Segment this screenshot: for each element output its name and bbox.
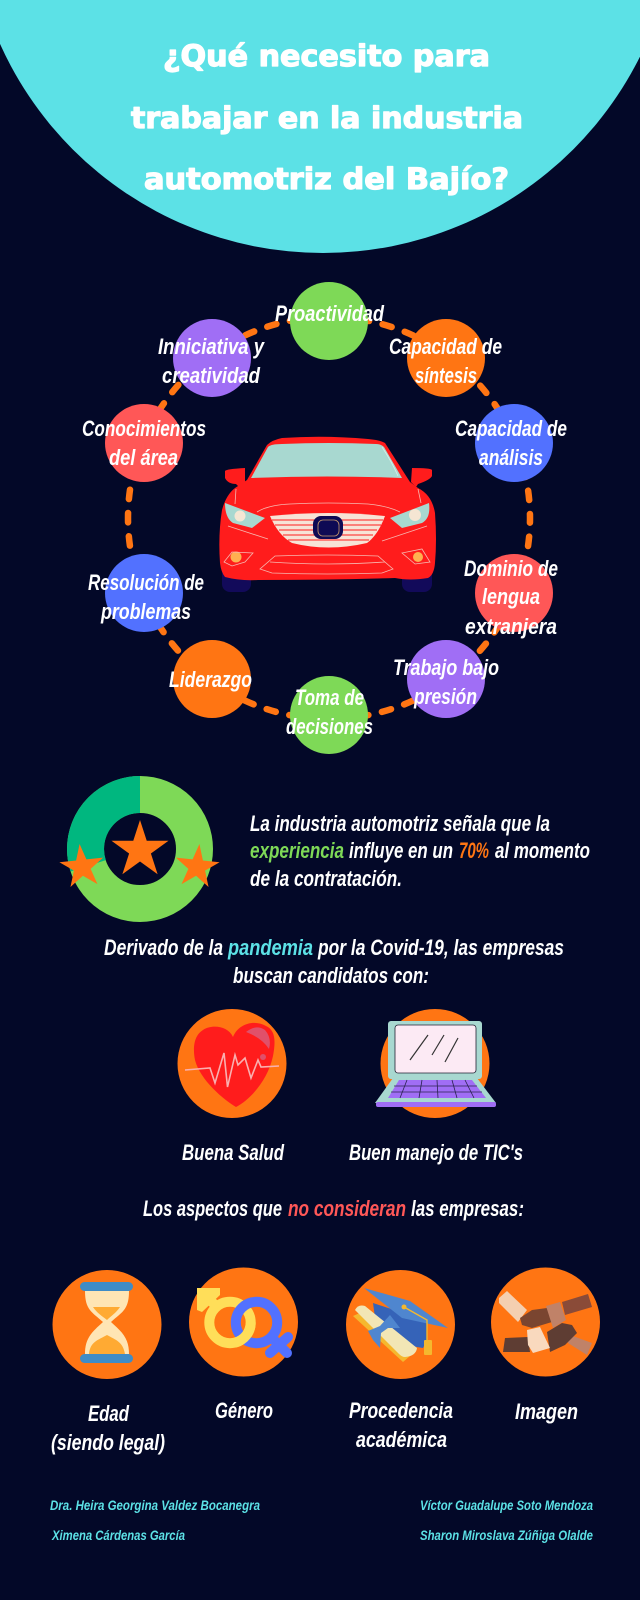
heading: aspects not considered: las empresas:	[411, 1196, 524, 1221]
label: Toma de decisiones: decisiones	[286, 714, 373, 739]
label: Inniciativa y creatividad	[158, 334, 265, 388]
title: trabajar en la industria	[131, 101, 523, 135]
label: Edad (siendo legal): (siendo legal)	[51, 1430, 165, 1455]
label: Toma de decisiones	[286, 685, 373, 739]
label: Toma de decisiones: Toma de	[295, 685, 364, 710]
label: Capacidad de análisis	[455, 416, 567, 470]
donut chart: 70% experience	[58, 794, 221, 904]
title: automotriz del Bajío?	[144, 162, 509, 196]
icon: laptop	[375, 1009, 496, 1118]
label: Resolución de problemas	[88, 570, 204, 624]
icon: heart with pulse	[178, 1009, 286, 1118]
credits: right: Sharon Miroslava Zúñiga Olalde	[420, 1527, 593, 1543]
label: Procedencia académica: académica	[356, 1427, 447, 1452]
text: experience statement: al momento	[495, 838, 590, 863]
label: Trabajo bajo presión	[393, 655, 499, 709]
label: Capacidad de análisis: análisis	[479, 445, 543, 470]
label: Dominio de lengua extranjera: lengua	[482, 584, 540, 609]
label: Conocimientos del área	[82, 416, 206, 470]
label: Liderazgo: Liderazgo	[169, 667, 252, 692]
text: experience statement: de la contratación.	[250, 866, 402, 891]
label: Capacidad de síntesis: síntesis	[415, 363, 477, 388]
label: Buen manejo de TIC's: Buen manejo de TIC's	[349, 1140, 523, 1165]
label: Dominio de lengua extranjera: extranjera	[465, 614, 557, 639]
label: Capacidad de análisis: Capacidad de	[455, 416, 567, 441]
title: ¿Qué necesito para	[163, 39, 490, 73]
text: experience statement: experiencia	[250, 838, 344, 863]
label: Inniciativa y creatividad: Inniciativa y	[158, 334, 265, 359]
title	[131, 39, 523, 196]
label: Buena Salud: Buena Salud	[182, 1140, 284, 1165]
text: pandemic statement: buscan candidatos con:	[233, 963, 429, 988]
credits: left	[50, 1497, 260, 1543]
label: Edad (siendo legal)	[51, 1401, 165, 1455]
icon: joined hands	[491, 1268, 600, 1376]
label: Procedencia académica	[349, 1398, 453, 1452]
label: Edad (siendo legal): Edad	[88, 1401, 129, 1426]
text: pandemic statement: pandemia	[227, 935, 313, 960]
text: pandemic statement: por la Covid-19, las empresas	[317, 935, 564, 960]
label: Resolución de problemas: problemas	[100, 599, 191, 624]
icon: gender symbols	[189, 1268, 298, 1376]
credits: left: Dra. Heira Georgina Valdez Bocanegra	[50, 1497, 260, 1513]
label: Capacidad de síntesis	[389, 334, 502, 388]
label: Dominio de lengua extranjera: Dominio de	[464, 556, 558, 581]
label: Proactividad: Proactividad	[275, 301, 384, 326]
label: Resolución de problemas: Resolución de	[88, 570, 204, 595]
icon: red car	[219, 437, 436, 592]
label: Inniciativa y creatividad: creatividad	[162, 363, 260, 388]
text: experience statement: 70%	[459, 838, 489, 863]
icon: hourglass	[52, 1270, 162, 1379]
heading: aspects not considered: no consideran	[288, 1196, 406, 1221]
label: Dominio de lengua extranjera	[464, 556, 558, 639]
label: Trabajo bajo presión: presión	[413, 684, 477, 709]
label: Conocimientos del área: del área	[109, 445, 178, 470]
credits: right	[420, 1497, 593, 1543]
heading: aspects not considered	[143, 1196, 524, 1221]
header circle	[0, 0, 640, 253]
text: experience statement	[250, 811, 590, 891]
text: experience statement: La industria automotriz señala que la	[250, 811, 550, 836]
text: pandemic statement: Derivado de la	[104, 935, 223, 960]
skill circles	[105, 282, 553, 754]
credits: left: Ximena Cárdenas García	[51, 1527, 185, 1543]
label: Trabajo bajo presión: Trabajo bajo	[393, 655, 499, 680]
label: Imagen: Imagen	[515, 1399, 578, 1424]
label: Género: Género	[215, 1398, 273, 1423]
text: experience statement: influye en un	[349, 838, 453, 863]
icon: graduation cap and diploma	[346, 1270, 455, 1379]
text: pandemic statement	[104, 935, 564, 988]
label: Conocimientos del área: Conocimientos	[82, 416, 206, 441]
dashed ring	[128, 317, 530, 719]
heading: aspects not considered: Los aspectos que	[143, 1196, 282, 1221]
label: Capacidad de síntesis: Capacidad de	[389, 334, 502, 359]
label: Procedencia académica: Procedencia	[349, 1398, 453, 1423]
credits: right: Víctor Guadalupe Soto Mendoza	[420, 1497, 593, 1513]
